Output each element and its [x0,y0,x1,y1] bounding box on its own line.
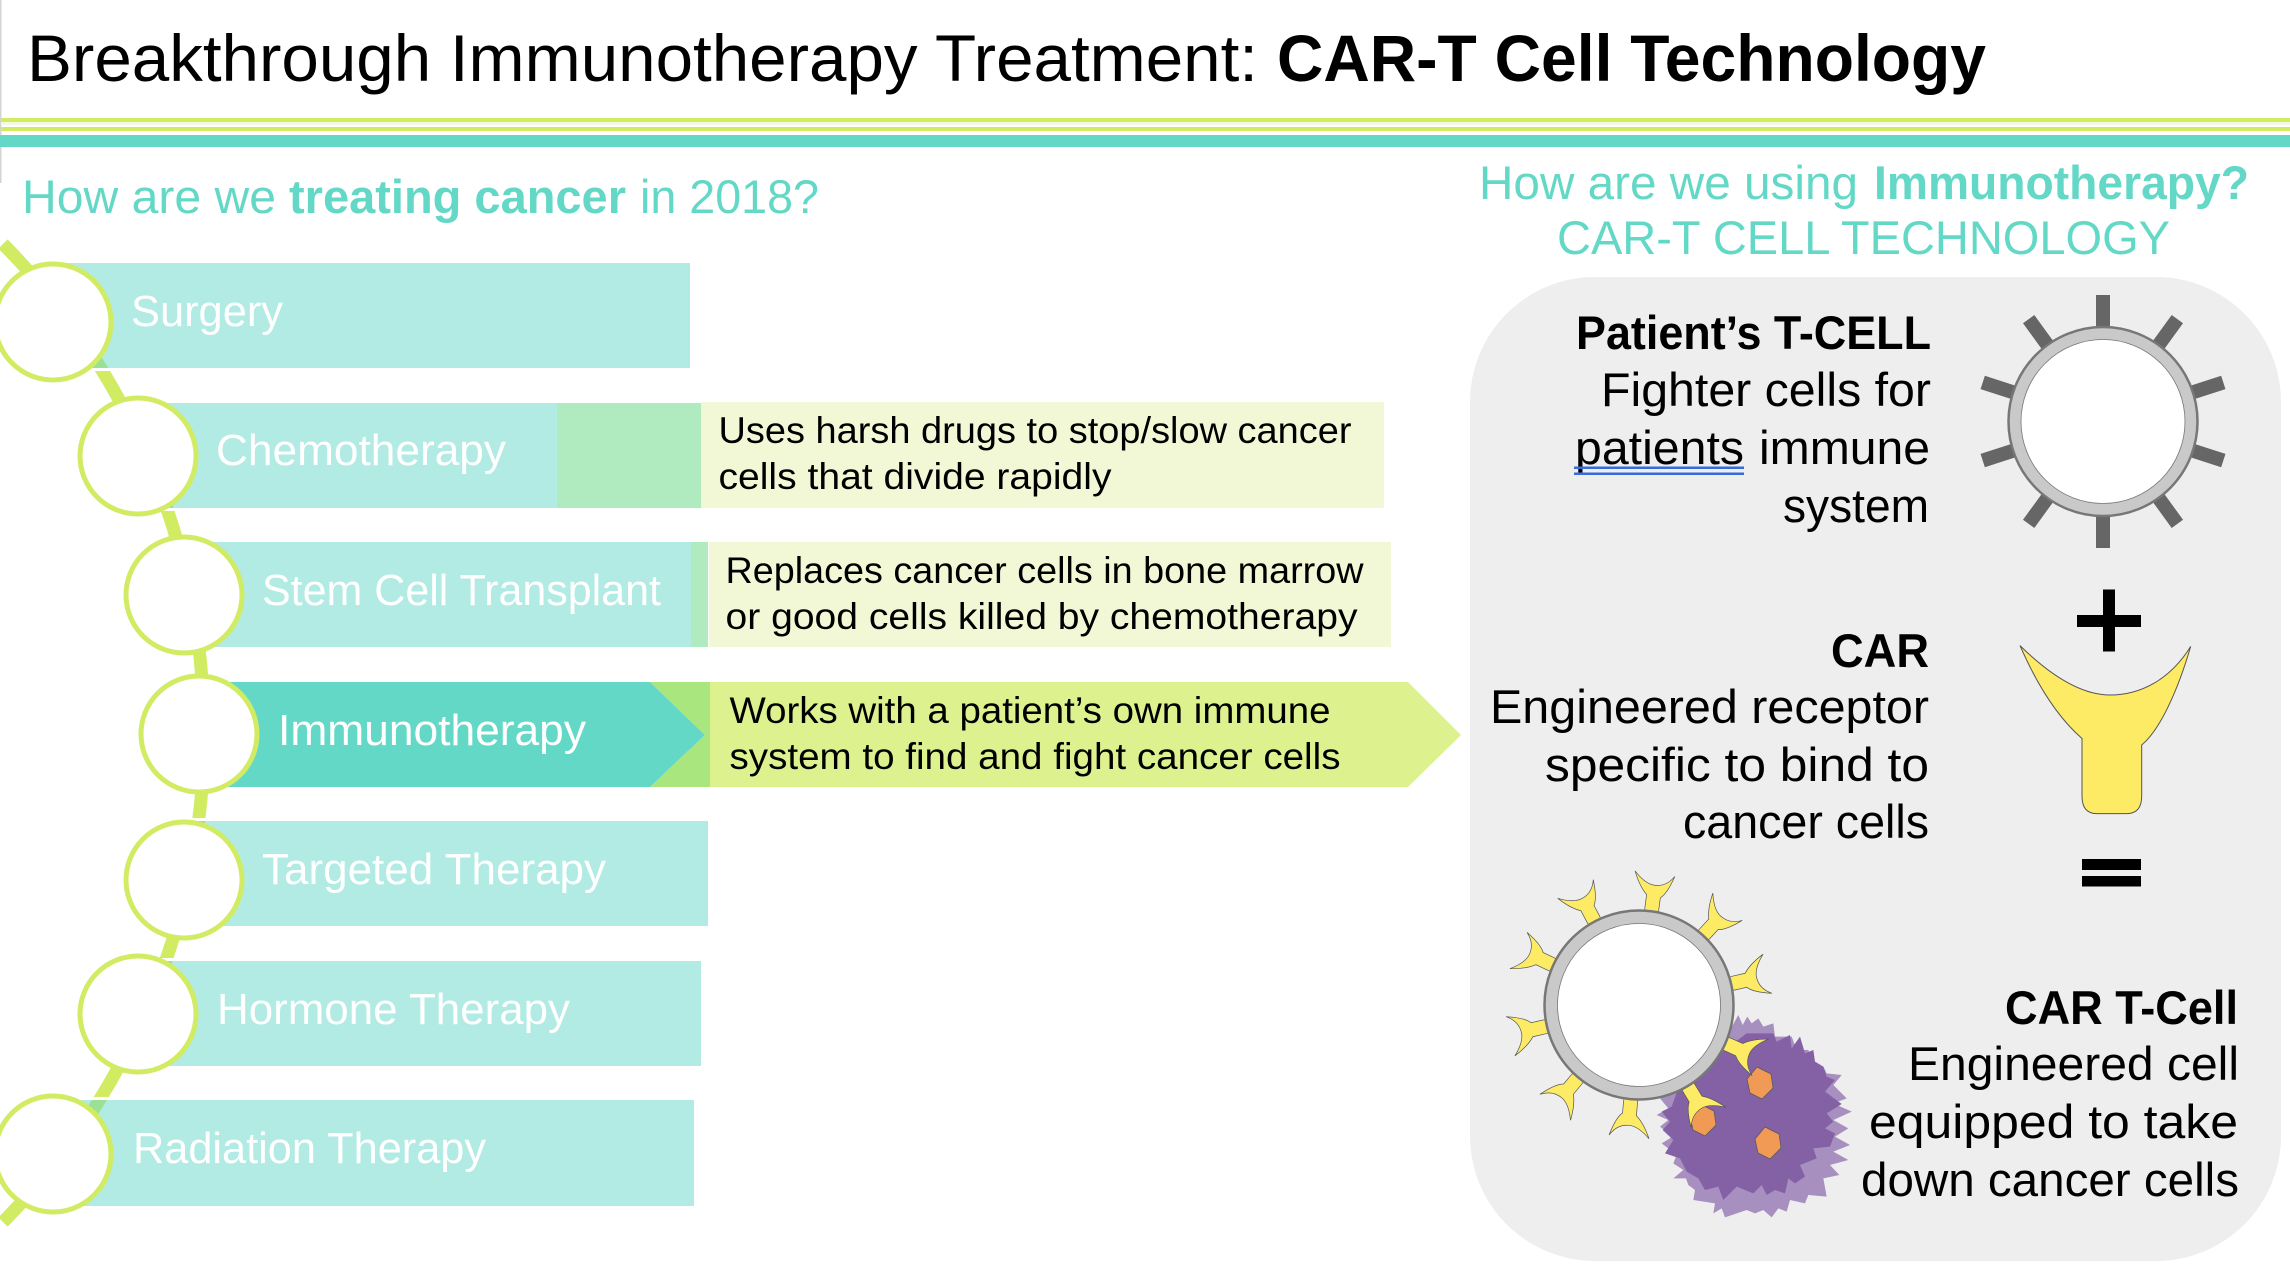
heading: treating cancer: in 2018? [640,170,819,223]
text: Patient's T-cell: Patient’s T-CELL [1576,306,1931,359]
row: Targeted Therapy: Targeted Therapy [262,845,606,894]
icon: CAR receptor [2020,646,2191,814]
text: CAR T-Cell: CAR T-Cell [2005,981,2238,1034]
row: Stem Cell Transplant: Stem Cell Transplant [262,566,661,615]
row: Surgery: Surgery [131,287,283,336]
title: Breakthrough Immunotherapy Treatment: [27,21,1258,95]
row: Radiation Therapy [0,1096,696,1212]
row: Targeted Therapy [126,820,710,938]
text: CAR: Engineered receptor [1490,680,1929,733]
heading: using immunotherapy: Immunotherapy? [1874,156,2249,209]
row: Chemotherapy: Chemotherapy [216,426,506,475]
T-cell ring [1544,910,1734,1100]
row: Stem Cell Transplant: Replaces cancer cells in bone marrow [726,550,1364,591]
text: Patient's T-cell [1574,306,1931,532]
panel: CAR-T explanation [1470,277,2281,1261]
text: CAR: specific to bind to [1545,738,1929,791]
text: Patient's T-cell: patients [1575,421,1744,474]
row: Chemotherapy: cells that divide rapidly [718,456,1112,497]
row: Immunotherapy (highlighted arrow): Works with a patient’s own immune [730,690,1330,731]
heading: treating cancer: treating cancer [289,170,626,223]
icon: plus sign [2077,590,2141,652]
text: Patient's T-cell: system [1783,479,1929,532]
cancer antigens [1690,1067,1781,1159]
row: Hormone Therapy [80,956,702,1072]
text: CAR T-Cell: equipped to take [1869,1095,2238,1148]
text: CAR T-Cell: Engineered cell [1908,1037,2239,1090]
heading: treating cancer: How are we [22,170,276,223]
row: Hormone Therapy: Hormone Therapy [217,985,570,1034]
row: Chemotherapy: Uses harsh drugs to stop/slow cancer [718,410,1352,451]
text: CAR T-Cell [1861,981,2239,1206]
row: Chemotherapy [80,398,1384,514]
CAR receptors on cell surface [1506,871,1772,1139]
row: Stem Cell Transplant: or good cells killed by chemotherapy [726,596,1358,637]
title [27,21,1986,95]
text: CAR: cancer cells [1683,795,1929,848]
icon: equals sign [2082,859,2141,886]
icon: T-cell [1981,295,2225,548]
text: CAR [1490,624,1929,848]
row: Immunotherapy (highlighted arrow): system to find and fight cancer cells [730,736,1340,777]
heading: using immunotherapy: CAR-T CELL TECHNOLOGY [1557,211,2170,264]
text: CAR T-Cell: down cancer cells [1861,1153,2239,1206]
header rule bands [0,0,2290,183]
text: Patient's T-cell: Fighter cells for [1601,363,1931,416]
title: CAR-T Cell Technology [1277,21,1986,95]
row: Stem Cell Transplant [126,537,1391,653]
heading: using immunotherapy [1479,156,2249,264]
row: Immunotherapy (highlighted arrow) [141,676,1461,792]
heading: treating cancer [22,170,819,223]
icon: CAR T-cell attacking cancer cell [1506,871,1852,1217]
row: Immunotherapy (highlighted arrow): Immunotherapy [278,706,586,755]
heading: using immunotherapy: How are we using [1479,156,1858,209]
timeline connector arc [3,244,204,1222]
text: Patient's T-cell: immune [1759,421,1930,474]
row: Surgery [0,262,692,380]
row: Radiation Therapy: Radiation Therapy [133,1124,486,1173]
cancer cell [1657,1015,1852,1217]
text: CAR: CAR [1831,624,1929,677]
